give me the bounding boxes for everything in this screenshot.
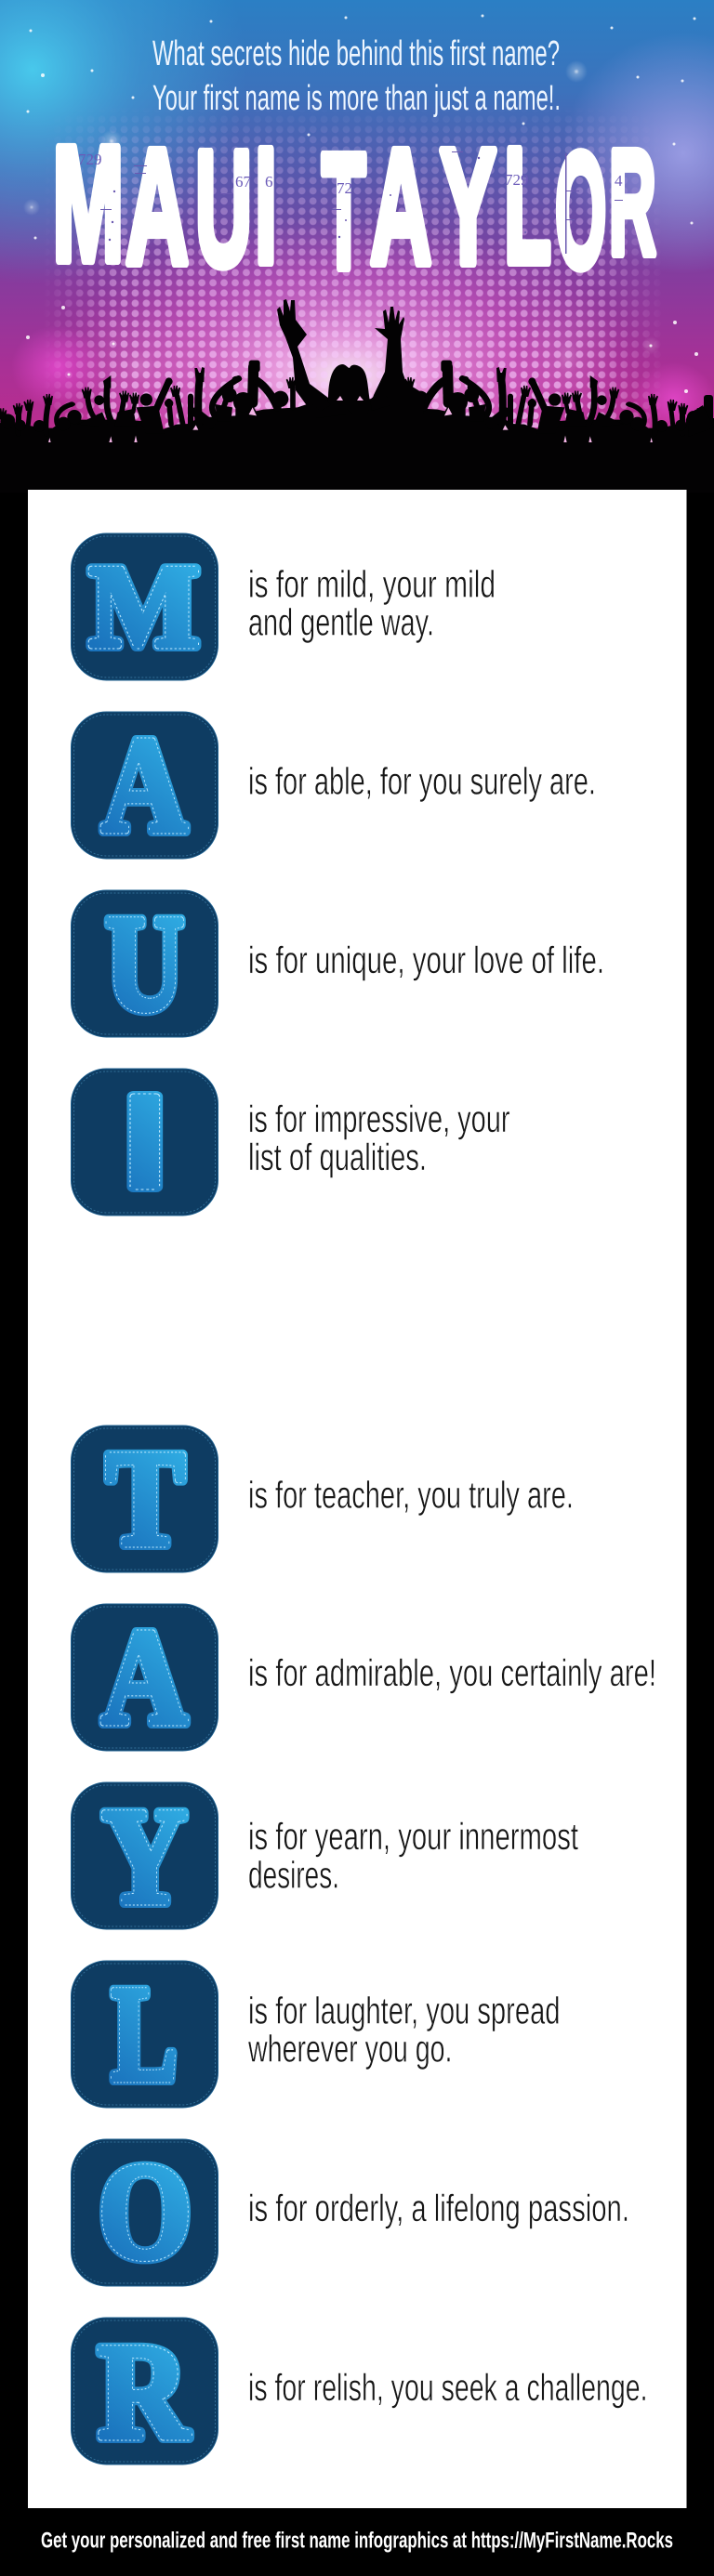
icon: letter I: I bbox=[123, 1068, 166, 1215]
icon: letter M: M bbox=[89, 543, 199, 672]
icon: letter M: M bbox=[89, 543, 199, 672]
sparkles bbox=[23, 15, 698, 393]
row: L is for laughter: wherever you go. bbox=[247, 2028, 452, 2070]
icon: letter T: T bbox=[106, 1423, 185, 1574]
title: MAUI TAYLOR: 4 bbox=[615, 172, 623, 190]
row: Y is for yearn bbox=[71, 1781, 578, 1932]
row: I is for impressive bbox=[71, 1068, 509, 1216]
icon: letter U: U bbox=[106, 887, 184, 1039]
icon: letter A: A bbox=[102, 709, 187, 861]
title: MAUI TAYLOR bbox=[52, 113, 656, 303]
row: Y is for yearn: is for yearn, your innermost bbox=[248, 1815, 578, 1858]
title: MAUI TAYLOR: T bbox=[322, 121, 366, 303]
row: I is for impressive: list of qualities. bbox=[248, 1136, 427, 1178]
icon: letter T bbox=[71, 1423, 218, 1574]
icon: letter U: U bbox=[106, 887, 184, 1039]
hero banner background bbox=[0, 0, 714, 455]
icon: letter R bbox=[71, 2316, 218, 2467]
icon: letter O: O bbox=[99, 2136, 192, 2287]
icon: letter U: U bbox=[106, 887, 184, 1039]
row: M is for mild: and gentle way. bbox=[248, 600, 434, 643]
icon: letter I: I bbox=[123, 1068, 166, 1215]
row: O is for orderly bbox=[71, 2136, 629, 2287]
row: U is for unique bbox=[71, 887, 604, 1039]
row: R is for relish bbox=[71, 2316, 647, 2467]
icon: letter L: L bbox=[112, 1958, 178, 2109]
row: A is for able bbox=[71, 709, 596, 861]
icon: letter I bbox=[71, 1068, 218, 1216]
icon: letter M bbox=[71, 533, 218, 680]
icon: letter O: O bbox=[99, 2136, 192, 2287]
icon: letter L: L bbox=[112, 1958, 178, 2109]
icon: letter A: A bbox=[102, 709, 187, 861]
row: Y is for yearn: desires. bbox=[248, 1853, 339, 1896]
title: MAUI TAYLOR: 67 bbox=[235, 173, 251, 191]
icon: letter A: A bbox=[102, 709, 187, 861]
icon: letter Y bbox=[71, 1781, 218, 1932]
row: L is for laughter: is for laughter, you spread bbox=[248, 1990, 560, 2032]
raised hands in the centre bbox=[0, 299, 714, 493]
row: M is for mild: is for mild, your mild bbox=[248, 563, 496, 606]
white panel bbox=[28, 490, 686, 2508]
title: MAUI TAYLOR: 729 bbox=[78, 151, 102, 168]
row: I is for impressive: is for impressive, your bbox=[248, 1097, 509, 1140]
icon: letter R: R bbox=[99, 2316, 190, 2467]
title: MAUI TAYLOR: U bbox=[195, 118, 252, 300]
icon: letter R: R bbox=[99, 2316, 190, 2467]
icon: letter I: I bbox=[123, 1068, 166, 1215]
row: T is for teacher: is for teacher, you truly are. bbox=[248, 1474, 574, 1517]
tagline bbox=[152, 34, 561, 118]
icon: letter T: T bbox=[106, 1423, 185, 1574]
icon: letter T: T bbox=[106, 1423, 185, 1574]
row: L is for laughter bbox=[71, 1958, 560, 2109]
crowd silhouette bbox=[0, 299, 714, 493]
text: R bbox=[609, 119, 656, 285]
icon: letter L: L bbox=[112, 1958, 178, 2109]
title: MAUI TAYLOR: 6 bbox=[265, 173, 273, 191]
icon: letter M: M bbox=[89, 543, 199, 672]
row: A is for admirable bbox=[71, 1601, 656, 1753]
title: MAUI TAYLOR: O bbox=[555, 120, 606, 302]
icon: letter A: A bbox=[102, 1601, 187, 1753]
title: MAUI TAYLOR: I bbox=[255, 115, 277, 297]
icon: letter L bbox=[71, 1958, 218, 2109]
icon: letter Y: Y bbox=[102, 1781, 187, 1932]
row: M is for mild bbox=[71, 533, 496, 680]
icon: letter Y: Y bbox=[102, 1781, 187, 1932]
icon: letter A: A bbox=[102, 1601, 187, 1753]
icon: letter A bbox=[71, 709, 218, 861]
icon: letter U bbox=[71, 887, 218, 1039]
icon: letter R: R bbox=[99, 2316, 190, 2467]
row: T is for teacher bbox=[71, 1423, 574, 1574]
icon: letter A bbox=[71, 1601, 218, 1753]
title: MAUI TAYLOR: 729 bbox=[505, 171, 528, 189]
icon: letter Y: Y bbox=[102, 1781, 187, 1932]
title: MAUI TAYLOR: 72 bbox=[337, 179, 352, 197]
title: MAUI TAYLOR: Y bbox=[440, 116, 496, 298]
title: MAUI TAYLOR: A bbox=[126, 116, 189, 298]
icon: letter O: O bbox=[99, 2136, 192, 2287]
title: MAUI TAYLOR: L bbox=[504, 115, 551, 297]
title: MAUI TAYLOR: M bbox=[52, 113, 124, 296]
title: MAUI TAYLOR: A bbox=[370, 116, 431, 298]
icon: letter A: A bbox=[102, 1601, 187, 1753]
